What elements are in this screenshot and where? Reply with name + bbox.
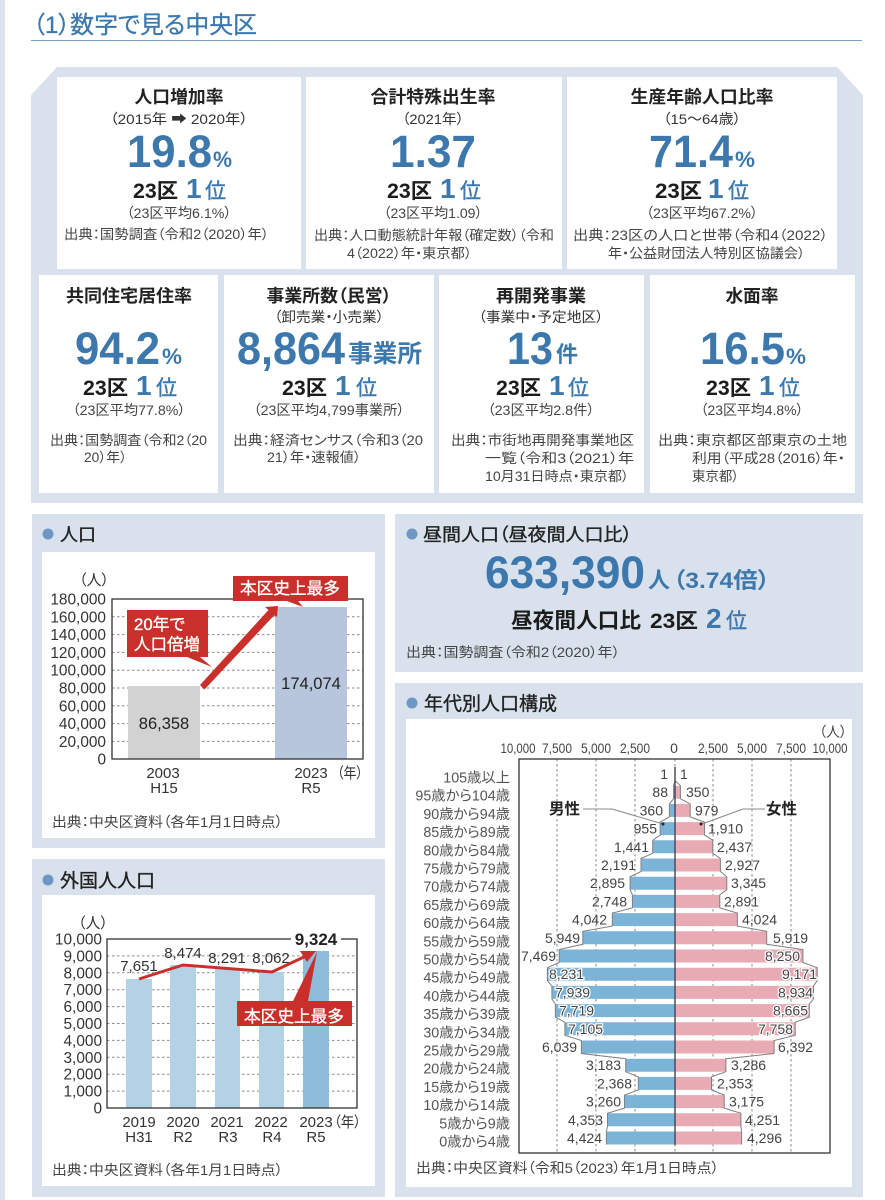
bar chart: foreign population: R3 (218, 1129, 238, 1146)
age labels: 70歳から74歳 (423, 879, 510, 896)
male values: 7,469 (521, 948, 556, 964)
big number: daytime population (485, 547, 770, 598)
female values: 4,024 (742, 912, 777, 928)
bar chart: foreign population: 0 (93, 1100, 102, 1118)
female values: 2,353 (717, 1075, 752, 1091)
card: working-age ratio: 年・公益財団法人特別区協議会） (608, 245, 805, 261)
rank: day-night ratio: 2 (706, 603, 722, 634)
card: working-age ratio (567, 77, 837, 269)
card: water surface ratio: 位 (779, 377, 800, 400)
female values: 2,891 (724, 893, 759, 909)
card: working-age ratio: 71.4 (649, 126, 733, 177)
age labels: 80歳から84歳 (423, 842, 510, 859)
callout: record high (233, 576, 348, 607)
legend: male: 男性 (549, 799, 580, 818)
card: population growth: % (213, 147, 232, 172)
axis labels: 2,500 (698, 740, 728, 756)
card: population growth: 19.8 (127, 126, 212, 177)
card: population growth: 位 (205, 180, 226, 203)
callout: doubled in 20 years (127, 610, 212, 667)
age labels: 50歳から54歳 (423, 952, 510, 968)
panel: population (32, 514, 385, 848)
bar chart: foreign population: 8,000 (63, 965, 102, 982)
bar chart: foreign population: 10,000 (55, 932, 102, 948)
age labels: 90歳から94歳 (423, 806, 510, 823)
card: total fertility rate: 4（2022）年・東京都） (347, 246, 472, 261)
card: population growth: （2015年 ➡ 2020年） (110, 111, 248, 127)
card: water surface ratio: 16.5 (700, 323, 785, 374)
female values: 3,345 (731, 875, 766, 891)
bar chart: population (50, 572, 363, 797)
bar chart: population: 80,000 (59, 680, 106, 698)
axis labels: 7,500 (776, 740, 806, 756)
card: business establishments: 事業所 (348, 340, 422, 368)
card: redevelopment projects: 一覧（令和3（2021）年 (485, 451, 634, 466)
card: collective housing (39, 275, 218, 493)
male values: 2,748 (592, 893, 627, 909)
bar chart: population: R5 (301, 780, 321, 797)
axis labels (500, 724, 848, 756)
card: total fertility rate: 出典：人口動態統計年報（確定数）（令和 (314, 228, 554, 243)
arrow: growth (200, 606, 278, 690)
age labels: 105歳以上 (443, 770, 510, 786)
card: population growth: 出典：国勢調査（令和2（2020）年） (64, 227, 269, 242)
card: total fertility rate: 合計特殊出生率 (370, 87, 496, 107)
card: water surface ratio: 東京都） (692, 469, 739, 484)
bar chart: foreign population: 8,291 (208, 950, 246, 967)
male outline (547, 768, 675, 1144)
male values: 1,441 (614, 839, 649, 855)
axis labels: 10,000 (812, 740, 848, 756)
bar chart: foreign population: 2023 (299, 1114, 333, 1131)
female bars (675, 786, 817, 1144)
age labels: 65歳から69歳 (423, 897, 510, 914)
age labels: 5歳から9歳 (439, 1115, 510, 1132)
card: redevelopment projects: 13 (507, 323, 553, 374)
male values: 2,895 (590, 875, 625, 891)
bar chart: population: 0 (97, 752, 106, 768)
population pyramid (415, 724, 848, 1153)
card: total fertility rate: 1.37 (390, 126, 476, 177)
female values: 979 (695, 802, 719, 818)
bar chart: foreign population: 2021 (210, 1114, 244, 1131)
female values: 2,437 (717, 839, 752, 855)
bar chart: population: 180,000 (50, 592, 106, 608)
male values: 7,939 (555, 984, 590, 1000)
card: working-age ratio: 位 (728, 180, 749, 203)
title: （1）数字で見る中央区 (33, 12, 257, 39)
female values: 1,910 (708, 821, 743, 837)
female values: 9,171 (782, 966, 817, 982)
bar chart: foreign population (55, 915, 361, 1146)
card: redevelopment projects: 出典：市街地再開発事業地区 (451, 433, 634, 448)
female values: 3,286 (731, 1057, 766, 1073)
bar chart: foreign population: 7,651 (120, 958, 158, 975)
card: business establishments: （卸売業・小売業） (274, 309, 384, 325)
axis labels: （人） (819, 724, 847, 740)
axis labels: 10,000 (500, 740, 536, 756)
panel: key figures (31, 67, 863, 503)
card: water surface ratio: 水面率 (726, 286, 778, 306)
card: redevelopment projects (439, 275, 644, 493)
big number: daytime population: （3.74倍） (673, 568, 770, 593)
card: total fertility rate (306, 77, 562, 269)
female values: 3,175 (729, 1094, 764, 1110)
card: population growth: 1 (186, 173, 202, 204)
female values: 2,927 (725, 857, 760, 873)
age labels: 40歳から44歳 (423, 988, 510, 1005)
bar chart: population: （人） (79, 572, 109, 589)
card: water surface ratio: 23区 (706, 377, 751, 400)
card: population growth: 23区 (133, 180, 178, 203)
age labels: 75歳から79歳 (423, 860, 510, 878)
card: business establishments: 事業所数（民営） (266, 286, 392, 306)
bar chart: foreign population: R2 (173, 1129, 193, 1146)
bar chart: population: 86,358 (139, 715, 189, 733)
age labels: 55歳から59歳 (423, 933, 510, 950)
bar chart: foreign population: 4,000 (63, 1033, 102, 1050)
bar chart: foreign population: 2019 (122, 1114, 156, 1131)
card: redevelopment projects: 1 (549, 370, 565, 401)
arrow: foreign population trend (139, 951, 316, 979)
female values: 1 (680, 766, 688, 782)
female outline (675, 768, 817, 1144)
source: population: 出典：中央区資料（各年1月1日時点） (52, 814, 283, 830)
bar chart: foreign population: （年） (334, 1114, 361, 1131)
bar chart: population: 100,000 (50, 663, 106, 680)
bar chart: foreign population: 2022 (254, 1114, 288, 1131)
card: redevelopment projects: （事業中・予定地区） (478, 309, 604, 325)
card: redevelopment projects: 件 (556, 342, 578, 367)
male values: 7,719 (559, 1003, 594, 1019)
card: water surface ratio: 1 (759, 370, 775, 401)
age labels: 30歳から34歳 (423, 1024, 510, 1041)
female values: 8,934 (778, 984, 813, 1000)
callout: record high: 本区史上最多 (240, 579, 340, 598)
female values: 350 (686, 784, 710, 800)
age labels: 20歳から24歳 (423, 1061, 510, 1078)
age labels: 60歳から64歳 (423, 915, 510, 932)
callout: record high (237, 952, 352, 1026)
card: collective housing: 23区 (83, 377, 128, 400)
male values: 3,183 (586, 1057, 621, 1073)
card: water surface ratio: 利用（平成28（2016）年・ (692, 451, 845, 466)
bar chart: population: 20,000 (59, 734, 106, 751)
bar chart: population: 174,074 (281, 675, 341, 693)
big number: daytime population: 人 (648, 568, 670, 593)
bar chart: population: 140,000 (50, 627, 106, 644)
heading: population: 人口 (60, 525, 96, 545)
bar chart: foreign population: 2,000 (63, 1067, 102, 1084)
male values: 4,042 (572, 912, 607, 928)
rank: day-night ratio: 昼夜間人口比 (511, 609, 641, 633)
female values: 8,250 (765, 948, 800, 964)
axis labels: 5,000 (737, 740, 767, 756)
bar chart: foreign population: R5 (306, 1129, 326, 1146)
male values: 3,260 (586, 1094, 621, 1110)
male values: 1 (660, 766, 668, 782)
bar chart: foreign population: 2020 (166, 1114, 200, 1131)
age labels: 15歳から19歳 (423, 1079, 510, 1096)
card: collective housing: 20）年） (84, 450, 127, 465)
card: business establishments: 21）年・速報値） (267, 450, 361, 465)
female values: 7,758 (758, 1021, 793, 1037)
age labels: 10歳から14歳 (423, 1097, 510, 1114)
source: population by age: 出典：中央区資料（令和5（2023）年1月1日時点） (416, 1160, 719, 1176)
male values: 2,368 (597, 1075, 632, 1091)
bar chart: population: （年） (337, 765, 363, 782)
female values: 5,919 (773, 930, 808, 946)
bar chart: foreign population: 3,000 (63, 1050, 102, 1067)
male values (521, 766, 668, 1146)
bar chart: population: 60,000 (59, 698, 106, 715)
female values: 4,296 (747, 1130, 782, 1146)
bar chart: foreign population: 6,000 (63, 999, 102, 1016)
card: business establishments: （23区平均4,799事業所） (254, 402, 404, 418)
female values: 4,251 (745, 1112, 780, 1128)
age labels (415, 770, 510, 1150)
card: business establishments: 8,864 (237, 323, 345, 374)
card: business establishments (224, 275, 434, 493)
bar chart: population: H15 (150, 780, 178, 797)
male values: 4,353 (568, 1112, 603, 1128)
callout: record high: 本区史上最多 (244, 1007, 344, 1026)
male values: 88 (652, 784, 668, 800)
axis labels: 0 (670, 740, 678, 756)
age labels: 95歳から104歳 (415, 788, 510, 805)
bar chart: population: 40,000 (59, 716, 106, 733)
female values (680, 766, 817, 1146)
heading: population by age: 年代別人口構成 (424, 693, 557, 715)
card: working-age ratio: 1 (708, 173, 724, 204)
male values: 955 (634, 821, 657, 837)
card: business establishments: 23区 (282, 377, 327, 400)
card: working-age ratio: 生産年齢人口比率 (630, 87, 774, 107)
card: redevelopment projects: 位 (568, 377, 589, 400)
card: working-age ratio: （15～64歳） (663, 111, 741, 127)
age labels: 85歳から89歳 (423, 824, 510, 841)
callout: doubled in 20 years: 20年で (134, 615, 185, 634)
card: collective housing: 出典：国勢調査（令和2（20 (50, 433, 207, 448)
axis labels: 5,000 (581, 740, 611, 756)
bar chart: foreign population: （人） (78, 915, 108, 932)
card: collective housing: （23区平均77.8%） (72, 402, 186, 418)
card: water surface ratio: （23区平均4.8%） (700, 402, 804, 418)
card: collective housing: 共同住宅居住率 (66, 286, 192, 306)
card: collective housing: 94.2 (75, 323, 160, 374)
card: business establishments: 位 (356, 377, 377, 400)
card: business establishments: 1 (335, 370, 351, 401)
card: water surface ratio: % (786, 344, 806, 369)
card: total fertility rate: 1 (440, 173, 456, 204)
age labels: 25歳から29歳 (423, 1042, 510, 1060)
axis labels: 2,500 (620, 740, 650, 756)
bar chart: foreign population: 7,000 (63, 982, 102, 999)
card: redevelopment projects: 23区 (496, 377, 541, 400)
card: collective housing: % (162, 344, 182, 369)
card: total fertility rate: （23区平均1.09） (384, 205, 482, 221)
male bars (547, 786, 675, 1144)
bar chart: foreign population: 5,000 (63, 1016, 102, 1033)
bar chart: foreign population: 1,000 (63, 1084, 102, 1101)
card: working-age ratio: % (735, 147, 755, 172)
axis labels: 7,500 (542, 740, 572, 756)
male values: 2,191 (601, 857, 636, 873)
female values: 6,392 (778, 1039, 813, 1055)
card: collective housing: 1 (136, 370, 152, 401)
card: population growth (57, 77, 301, 269)
age labels: 35歳から39歳 (423, 1006, 510, 1023)
bar chart: foreign population: H31 (125, 1129, 153, 1146)
panel: daytime population (395, 514, 863, 672)
big number: daytime population: 633,390 (485, 547, 645, 598)
bar chart: foreign population: 9,324 (295, 930, 338, 949)
bar chart: foreign population: 8,474 (164, 945, 202, 962)
bar chart: foreign population: R4 (262, 1129, 282, 1146)
card: working-age ratio: 23区 (655, 180, 702, 203)
rank: day-night ratio: 位 (726, 610, 747, 633)
bar chart: population: 160,000 (50, 609, 106, 626)
card: collective housing: 位 (156, 377, 177, 400)
heading: daytime population: 昼間人口（昼夜間人口比） (423, 525, 632, 545)
male values: 5,949 (545, 930, 580, 946)
source: foreign population: 出典：中央区資料（各年1月1日時点） (52, 1162, 283, 1178)
card: total fertility rate: 位 (460, 180, 481, 203)
card: working-age ratio: 出典：23区の人口と世帯（令和4（2022） (573, 228, 828, 243)
heading: population (42, 525, 96, 545)
male values: 360 (640, 802, 663, 818)
card: water surface ratio: 出典：東京都区部東京の土地 (658, 433, 848, 448)
card: water surface ratio (650, 275, 855, 493)
legend: male (549, 799, 664, 826)
bar chart: foreign population: 9,000 (63, 948, 102, 965)
age labels: 0歳から4歳 (439, 1134, 510, 1150)
male values: 8,231 (549, 966, 584, 982)
rank: day-night ratio (511, 603, 747, 634)
card: redevelopment projects: （23区平均2.8件） (488, 402, 594, 418)
legend: female (700, 799, 797, 826)
card: population growth: 人口増加率 (134, 87, 224, 107)
card: population growth: （23区平均6.1%） (126, 205, 232, 221)
male values: 7,105 (568, 1021, 603, 1037)
callout: doubled in 20 years: 人口倍増 (134, 635, 200, 654)
heading: foreign population: 外国人人口 (60, 870, 155, 892)
bar chart: population: 2023 (294, 765, 328, 782)
card: redevelopment projects: 再開発事業 (496, 286, 587, 306)
bar chart: population: 120,000 (50, 645, 106, 662)
male values: 6,039 (542, 1039, 577, 1055)
female values: 8,665 (773, 1003, 808, 1019)
card: business establishments: 出典：経済センサス（令和3（20 (233, 433, 423, 448)
rank: day-night ratio: 23区 (650, 610, 698, 633)
card: total fertility rate: （2021年） (402, 111, 464, 127)
bar chart: population: 2003 (146, 765, 180, 782)
panel: population by age (395, 683, 863, 1197)
age labels: 45歳から49歳 (423, 970, 510, 987)
card: working-age ratio: （23区平均67.2%） (646, 205, 758, 221)
card: total fertility rate: 23区 (387, 180, 432, 203)
bar chart: foreign population: 8,062 (252, 950, 290, 967)
legend: female: 女性 (766, 799, 797, 818)
male values: 4,424 (567, 1130, 602, 1146)
card: redevelopment projects: 10月31日時点・東京都） (485, 469, 629, 484)
panel: foreign population (32, 859, 385, 1197)
source: daytime population: 出典：国勢調査（令和2（2020）年） (406, 645, 620, 660)
